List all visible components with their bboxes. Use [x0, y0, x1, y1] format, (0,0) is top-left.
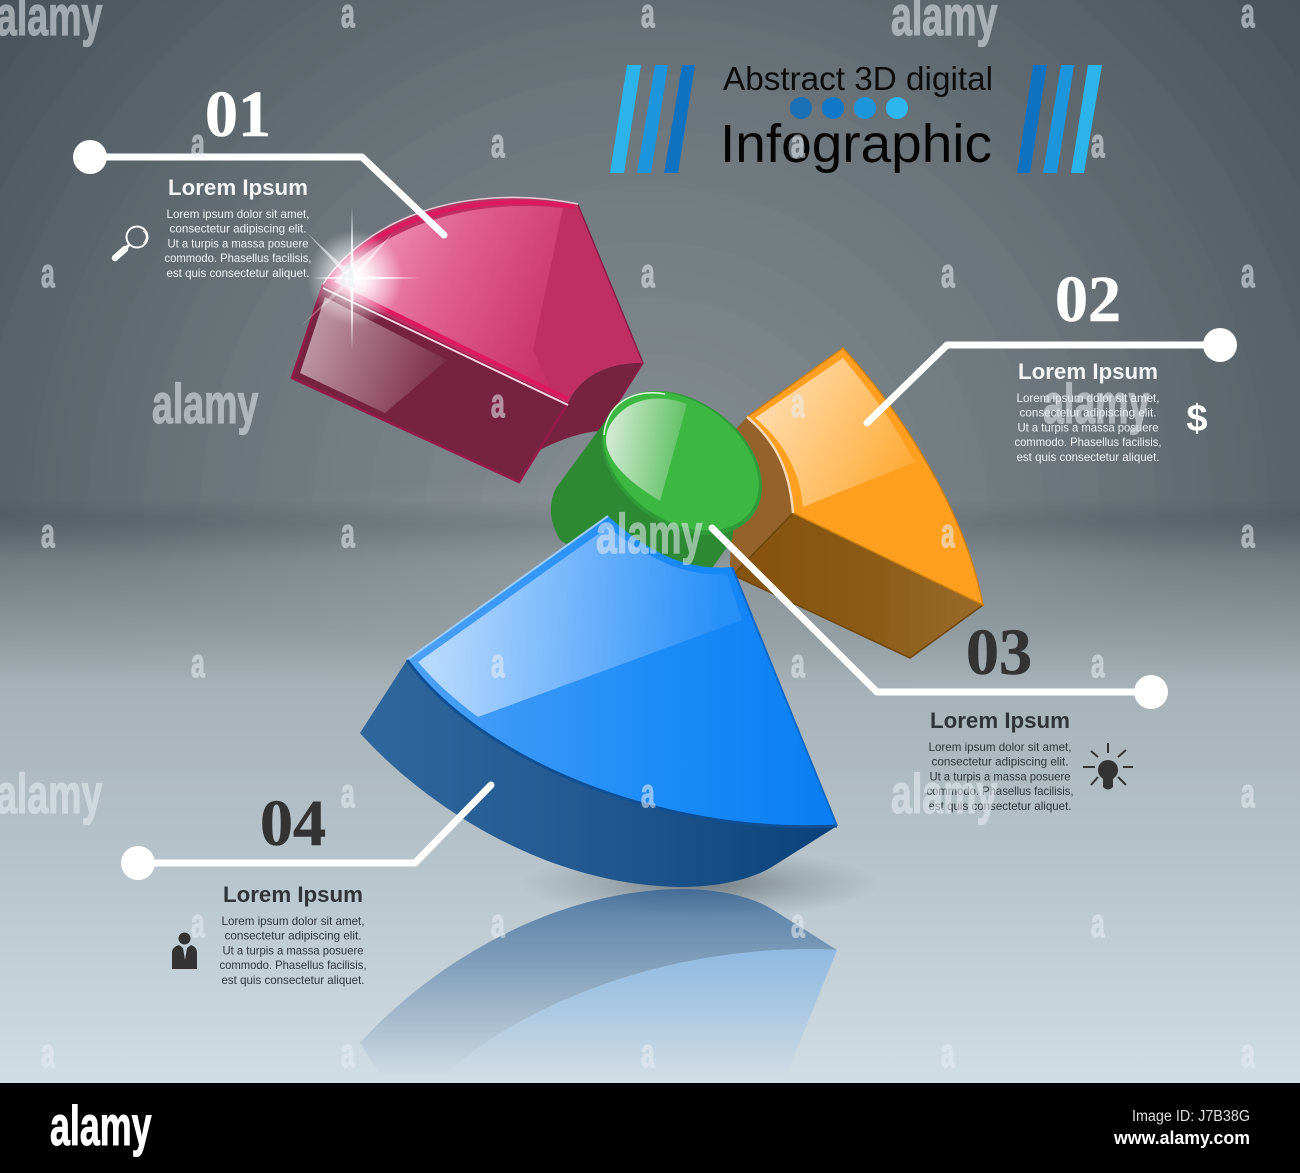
block 03 text	[926, 616, 1074, 813]
body 02: Lorem ipsum dolor sit amet,	[1016, 391, 1160, 405]
watermarks: a	[1091, 901, 1106, 947]
body 01: commodo. Phasellus facilisis,	[164, 251, 312, 265]
watermarks: a	[1241, 251, 1256, 297]
body 02	[1014, 391, 1162, 464]
block 02 text	[1014, 263, 1162, 464]
icon: businessman	[172, 932, 197, 969]
block 01 text	[164, 78, 312, 280]
body 03	[926, 740, 1074, 813]
watermarks: a	[491, 901, 506, 947]
watermarks: a	[941, 1031, 956, 1077]
icon: light bulb	[1083, 743, 1133, 790]
watermarks: a	[791, 641, 806, 687]
body 02: est quis consectetur aliquet.	[1016, 450, 1160, 464]
body 03: commodo. Phasellus facilisis,	[926, 784, 1074, 798]
body 01: est quis consectetur aliquet.	[166, 266, 310, 280]
background: floor	[0, 515, 1300, 1083]
reflection of blue piece	[360, 889, 837, 1062]
footer bar	[0, 1083, 1300, 1171]
body 04: commodo. Phasellus facilisis,	[220, 958, 366, 972]
watermarks: alamy	[596, 504, 703, 566]
watermarks: a	[341, 771, 356, 817]
body 01	[164, 207, 312, 280]
orange segment	[730, 348, 983, 658]
watermarks: a	[341, 251, 356, 297]
watermarks: alamy	[1043, 374, 1150, 436]
body 01: consectetur adipiscing elit.	[170, 222, 306, 236]
watermarks: a	[1241, 771, 1256, 817]
number 01: 01	[205, 78, 271, 151]
body 04: consectetur adipiscing elit.	[224, 929, 362, 943]
watermarks: a	[941, 251, 956, 297]
footer image id: Image ID: J7B38G	[1132, 1108, 1250, 1125]
title dots	[790, 97, 908, 119]
body 02: commodo. Phasellus facilisis,	[1014, 435, 1162, 449]
body 04: Lorem ipsum dolor sit amet,	[222, 914, 364, 928]
watermarks: a	[41, 511, 56, 557]
watermarks: a	[641, 1031, 656, 1077]
body 03: est quis consectetur aliquet.	[928, 799, 1072, 813]
body 01: Ut a turpis a massa posuere	[168, 236, 309, 250]
watermarks: a	[1091, 121, 1106, 167]
body 01: Lorem ipsum dolor sit amet,	[166, 207, 310, 221]
leader line 02	[867, 328, 1237, 423]
watermarks: a	[641, 771, 656, 817]
watermarks: a	[41, 1031, 56, 1077]
heading 04: Lorem Ipsum	[223, 882, 363, 907]
blue segment	[360, 516, 837, 887]
body 02: consectetur adipiscing elit.	[1020, 406, 1156, 420]
icon: dollar: $	[1186, 398, 1208, 440]
watermarks: a	[641, 251, 656, 297]
body 04: est quis consectetur aliquet.	[222, 973, 364, 987]
right stripes	[1017, 65, 1102, 173]
leader line 03	[712, 528, 1168, 709]
watermarks: a	[1241, 511, 1256, 557]
number 04: 04	[260, 787, 326, 860]
body 03: consectetur adipiscing elit.	[932, 755, 1068, 769]
watermarks: a	[491, 381, 506, 427]
watermarks: a	[491, 121, 506, 167]
heading 01: Lorem Ipsum	[168, 175, 308, 200]
title block	[610, 60, 1102, 174]
green cylinder	[551, 361, 790, 574]
body 02: Ut a turpis a massa posuere	[1018, 420, 1159, 434]
watermarks: a	[791, 121, 806, 167]
heading 03: Lorem Ipsum	[930, 708, 1070, 733]
leader line 01	[73, 140, 444, 235]
floor shadow under blue piece	[520, 850, 880, 918]
watermarks: a	[1091, 641, 1106, 687]
watermarks: alamy	[891, 764, 998, 826]
background: wall with concentric rings	[0, 0, 1300, 668]
title line 1: Abstract 3D digital	[723, 60, 993, 97]
sparkle on pink segment	[300, 207, 420, 350]
body 04: Ut a turpis a massa posuere	[222, 943, 364, 957]
body 03: Lorem ipsum dolor sit amet,	[928, 740, 1072, 754]
body 03: Ut a turpis a massa posuere	[930, 769, 1071, 783]
watermarks: a	[791, 381, 806, 427]
watermarks: a	[341, 511, 356, 557]
left stripes	[610, 65, 695, 173]
watermarks: a	[491, 641, 506, 687]
watermarks: a	[191, 641, 206, 687]
icon: magnifier	[115, 226, 148, 258]
leader line 04	[121, 785, 491, 880]
body 04	[220, 914, 366, 987]
pink segment	[292, 197, 643, 482]
number 03: 03	[966, 616, 1032, 689]
footer logo: alamy	[50, 1094, 152, 1157]
heading 02: Lorem Ipsum	[1018, 359, 1158, 384]
watermarks: a	[191, 901, 206, 947]
title line 2: Infographic	[720, 114, 992, 174]
floor horizon glow	[130, 470, 1170, 650]
watermarks: a	[1241, 1031, 1256, 1077]
watermarks: a	[791, 901, 806, 947]
watermarks: a	[41, 251, 56, 297]
number 02: 02	[1055, 263, 1121, 336]
watermarks: a	[341, 1031, 356, 1077]
watermarks: alamy	[152, 374, 259, 436]
block 04 text	[220, 787, 366, 987]
footer url: www.alamy.com	[1113, 1128, 1250, 1148]
watermarks: a	[191, 121, 206, 167]
watermarks: a	[941, 511, 956, 557]
